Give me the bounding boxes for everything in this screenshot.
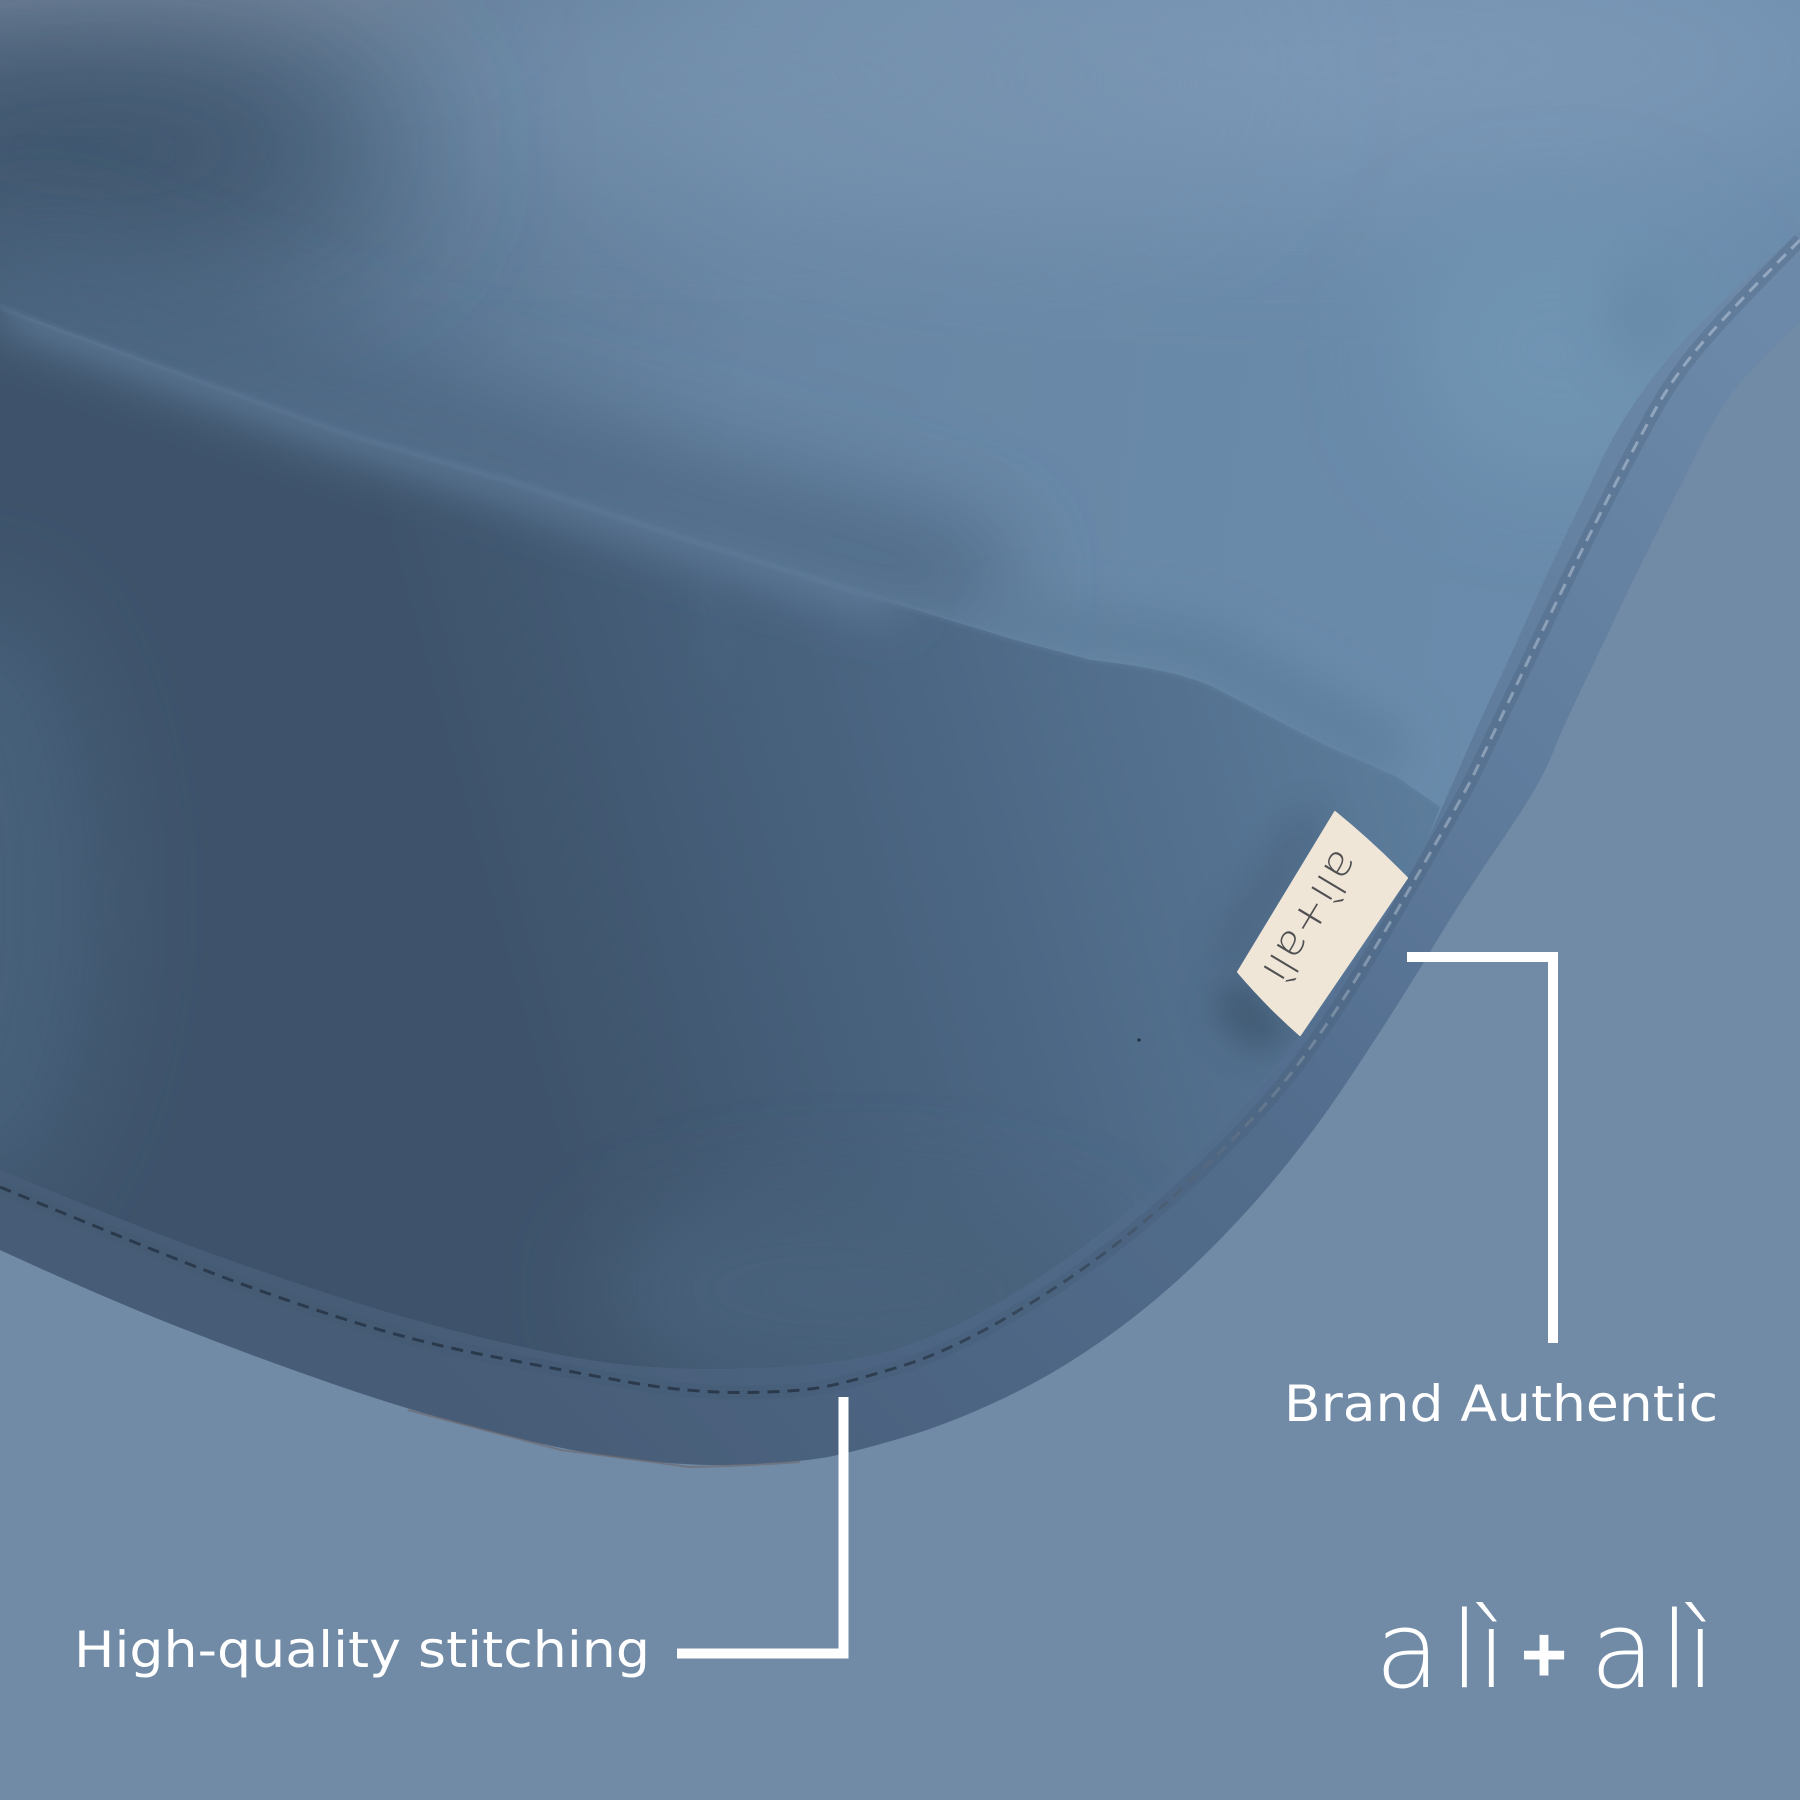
upper bib panel — [0, 0, 1800, 1400]
callout bracket line — [1407, 957, 1553, 1343]
sewn brand tag — [1238, 812, 1407, 1035]
binding inner roll shade — [0, 240, 1800, 1393]
logo plus sign: + — [1521, 1610, 1567, 1699]
tag wordmark: alì+alì — [1252, 842, 1370, 992]
callout bracket line — [677, 1397, 844, 1654]
brand logo — [1375, 1589, 1715, 1712]
pocket crease highlight — [0, 307, 1440, 807]
logo right word: alì — [1590, 1589, 1715, 1712]
callout: Brand Authentic — [1284, 957, 1718, 1433]
pocket panel — [0, 320, 1440, 1369]
callout label: Brand Authentic — [1284, 1375, 1718, 1433]
binding lower edge shade — [408, 1410, 800, 1467]
logo left word: alì — [1375, 1589, 1506, 1712]
stitching — [0, 240, 1800, 1393]
tag fabric — [1238, 812, 1407, 1035]
tag shadow — [1210, 975, 1298, 1050]
callout label: High-quality stitching — [74, 1621, 650, 1679]
callout: High-quality stitching — [74, 1397, 844, 1679]
